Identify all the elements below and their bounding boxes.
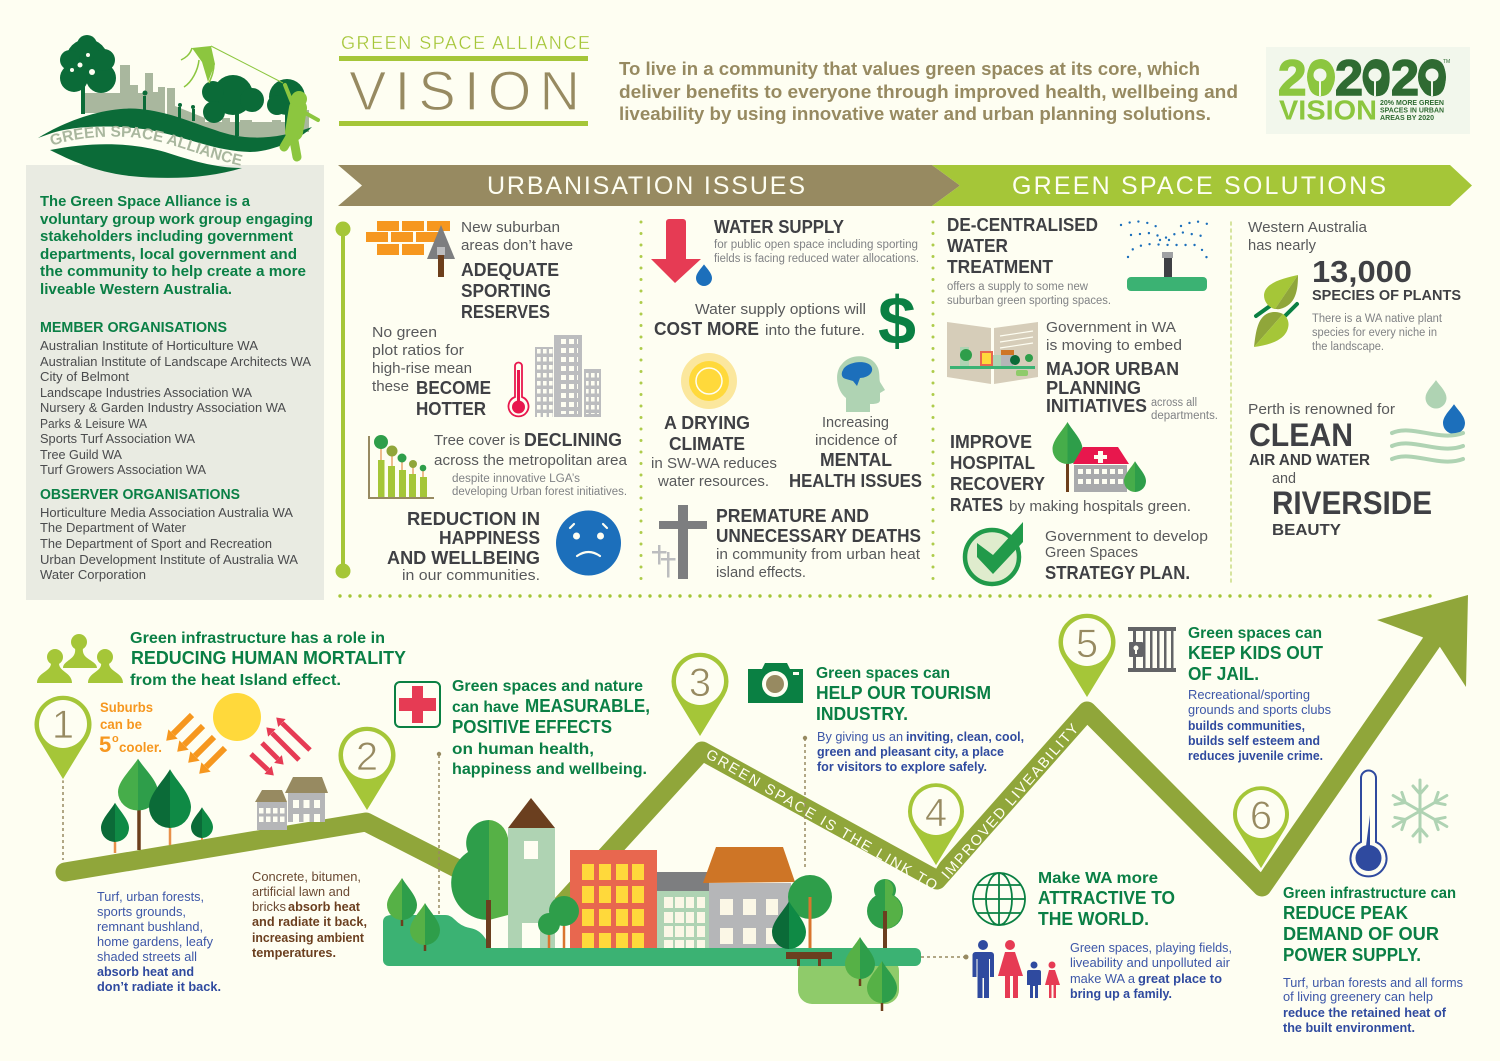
text: premature deaths: in community from urban heat xyxy=(716,546,921,563)
text: tourism: for visitors to explore safely. xyxy=(817,760,987,774)
observer organisations list: The Department of Water xyxy=(40,521,186,535)
text: 13,000 species of plants: has nearly xyxy=(1248,237,1316,254)
text: strategy plan xyxy=(1045,528,1208,583)
text: strategy plan: Green Spaces xyxy=(1045,544,1138,561)
text: turf and forests: don’t radiate it back. xyxy=(97,980,221,994)
member organisations list: Nursery & Garden Industry Association WA xyxy=(40,401,287,415)
text: 13,000 species of plants: SPECIES OF PLANTS xyxy=(1312,287,1461,304)
text: a drying climate: A DRYING xyxy=(664,412,750,433)
road caption xyxy=(703,721,1082,894)
text: jail: builds self esteem and xyxy=(1188,734,1320,748)
logo: 20 20 vision: 2020 xyxy=(1335,50,1447,106)
column: urbanisation issues two xyxy=(651,216,922,581)
icon: thermometer and towers xyxy=(508,335,601,417)
icon: trees on the hill xyxy=(101,759,213,853)
text: cost more: COST MORE xyxy=(654,318,759,339)
member organisations list: Australian Institute of Horticulture WA xyxy=(40,339,259,353)
text: positive effects: Green spaces and nature xyxy=(452,678,643,695)
text: concrete and bitumen xyxy=(252,870,367,960)
icon: globe xyxy=(973,873,1025,925)
ground strip xyxy=(383,948,921,966)
map pin 2 xyxy=(338,726,396,811)
callout: suburbs cooler: Suburbs xyxy=(100,699,153,715)
member organisations list: Turf Growers Association WA xyxy=(40,463,207,477)
text: jail: KEEP KIDS OUT xyxy=(1188,642,1324,663)
text: reduction in happiness: REDUCTION IN xyxy=(407,508,540,529)
text: de-centralised water treatment: WATER xyxy=(947,235,1008,256)
text: mental health issues: MENTAL xyxy=(820,449,892,470)
text: great place: Green spaces, playing fields, xyxy=(1070,941,1232,955)
section 5: keep kids out of jail xyxy=(1058,613,1331,763)
text: tree cover declining: DECLINING xyxy=(524,429,622,450)
text: jail: Green spaces can xyxy=(1188,625,1322,642)
text: water supply: WATER SUPPLY xyxy=(714,216,845,237)
vision statement: liveability by using innovative water and urban planning solutions. xyxy=(619,103,1211,124)
logo: 20 20 vision: AREAS BY 2020 xyxy=(1380,113,1434,122)
text: clean air and riverside beauty xyxy=(1248,401,1432,539)
text: positive effects: on human health, xyxy=(452,741,594,758)
text: mental health issues: incidence of xyxy=(815,432,898,449)
member organisations list: MEMBER ORGANISATIONS xyxy=(40,320,227,336)
text: turf and forests: remnant bushland, xyxy=(97,920,203,934)
text: improve hospital recovery rates: IMPROVE xyxy=(950,431,1032,452)
member organisations list: Parks & Leisure WA xyxy=(40,417,148,431)
text: power supply: Green infrastructure can xyxy=(1283,885,1456,902)
text: improve hospital recovery rates xyxy=(950,431,1191,515)
text: become hotter: high-rise mean xyxy=(372,360,472,377)
column: green space solutions one xyxy=(947,214,1218,584)
text: clean air and riverside beauty: CLEAN xyxy=(1249,417,1353,453)
observer organisations list xyxy=(40,487,299,582)
text: a drying climate: CLIMATE xyxy=(669,433,745,454)
text: reduction in happiness: AND WELLBEING xyxy=(387,547,540,568)
text: jail: Recreational/sporting xyxy=(1188,688,1310,702)
map pin 1 xyxy=(34,695,92,780)
text: clean air and riverside beauty: BEAUTY xyxy=(1272,522,1341,539)
text: turf and forests: Turf, urban forests, xyxy=(97,890,204,904)
text: clean air and riverside beauty: AIR AND WATER xyxy=(1249,452,1370,469)
text: major urban planning initiatives: INITIATIVES xyxy=(1046,395,1147,416)
road caption: GREEN SPACE IS THE LINK TO xyxy=(703,747,940,894)
column: green space solutions two xyxy=(1248,219,1465,539)
text: tourism xyxy=(816,665,1024,774)
text: mental health issues: HEALTH ISSUES xyxy=(789,470,922,491)
text: power supply: Turf, urban forests and all forms xyxy=(1283,976,1463,990)
text: premature deaths: PREMATURE AND xyxy=(716,505,869,526)
icon: leaves xyxy=(1254,275,1298,347)
member organisations list: Landscape Industries Association WA xyxy=(40,386,253,400)
icon: check mark xyxy=(965,522,1023,584)
text: water supply: for public open space including sporting xyxy=(714,239,918,251)
logo: 20 20 vision: VISION xyxy=(1279,94,1377,126)
text: concrete and bitumen: and radiate it back, xyxy=(252,915,367,929)
text: attractive to the world: Make WA more xyxy=(1038,870,1158,887)
text: power supply: REDUCE PEAK xyxy=(1283,902,1409,923)
text: jail: OF JAIL. xyxy=(1188,663,1259,684)
text: great place: liveability and unpolluted air xyxy=(1070,956,1230,970)
icon: people xyxy=(37,634,123,683)
text: attractive to the world xyxy=(1038,870,1175,929)
text: major urban planning initiatives: MAJOR URBAN xyxy=(1046,358,1179,379)
icon: medical cross xyxy=(395,682,440,727)
icon: urban plan book xyxy=(947,322,1038,384)
small trees xyxy=(387,875,903,1011)
text: major urban planning initiatives: across all xyxy=(1151,397,1197,409)
vision statement xyxy=(619,58,1238,124)
observer organisations list: Urban Development Institute of Australia WA xyxy=(40,553,299,567)
text: major urban planning initiatives: is moving to embed xyxy=(1046,337,1182,354)
text: improve hospital recovery rates: RATES xyxy=(950,494,1003,515)
banner: urbanisation issues: URBANISATION ISSUES xyxy=(487,172,805,200)
icon: jail bars xyxy=(1128,627,1176,672)
text: cost more xyxy=(654,301,866,339)
text: power supply xyxy=(1283,885,1463,1035)
logo: 20 20 vision xyxy=(1266,47,1470,134)
member organisations list: Australian Institute of Landscape Architects WA xyxy=(40,355,312,369)
text: turf and forests: absorb heat and xyxy=(97,965,194,979)
icon: water down arrow and drop xyxy=(651,219,712,286)
section 2: measurable positive effects xyxy=(338,678,650,811)
text: premature deaths: island effects. xyxy=(716,564,806,581)
text: reduction in happiness xyxy=(387,508,540,584)
heading: REDUCING HUMAN MORTALITY xyxy=(131,647,407,668)
text: turf and forests xyxy=(97,890,221,994)
text: jail: builds communities, xyxy=(1188,719,1305,733)
icon: sun xyxy=(681,353,737,409)
text: become hotter: HOTTER xyxy=(416,398,486,419)
text: tourism: HELP OUR TOURISM xyxy=(816,682,991,703)
icon: snowflake xyxy=(1390,780,1450,842)
logo: 20 20 vision: TM xyxy=(1443,59,1450,65)
text: concrete and bitumen: increasing ambient xyxy=(252,931,365,945)
text: become hotter: these xyxy=(372,378,409,395)
callout: suburbs cooler xyxy=(99,699,162,757)
logo: green space alliance xyxy=(38,35,320,178)
building: middle block xyxy=(657,872,709,948)
text: water supply xyxy=(714,216,919,265)
intro text: stakeholders including government xyxy=(40,229,293,245)
text: 13,000 species of plants: the landscape. xyxy=(1312,341,1384,353)
text: great place: bring up a family. xyxy=(1070,987,1172,1001)
text: 13,000 species of plants: species for every niche in xyxy=(1312,327,1437,339)
text: become hotter: plot ratios for xyxy=(372,342,464,359)
map pin 3: 3 xyxy=(689,661,711,705)
callout: suburbs cooler: cooler. xyxy=(119,739,162,755)
text: adequate sporting reserves: RESERVES xyxy=(461,301,550,322)
text: de-centralised water treatment: DE-CENTRALISED xyxy=(947,214,1098,235)
tree: large xyxy=(451,820,508,948)
member organisations list: City of Belmont xyxy=(40,370,130,384)
map pin 4 xyxy=(907,782,965,867)
text: become hotter: BECOME xyxy=(416,377,491,398)
callout: suburbs cooler: can be xyxy=(100,716,142,732)
heading xyxy=(130,630,407,689)
map pin 6 xyxy=(1232,785,1290,870)
icon: water drops and waves xyxy=(1392,380,1465,462)
text: premature deaths xyxy=(716,505,921,581)
text: concrete and bitumen: bricks xyxy=(252,900,286,914)
text: become hotter: No green xyxy=(372,324,437,341)
intro text: the community to help create a more xyxy=(40,264,306,280)
text: attractive to the world: ATTRACTIVE TO xyxy=(1038,887,1175,908)
map pin 6: 6 xyxy=(1250,794,1272,838)
icon: houses xyxy=(255,777,328,830)
map pin 2: 2 xyxy=(356,735,378,779)
callout: suburbs cooler: 5 xyxy=(99,732,111,757)
text: strategy plan: STRATEGY PLAN. xyxy=(1045,562,1190,583)
icon: sun with radiation arrows xyxy=(173,693,310,770)
text: positive effects: MEASURABLE, xyxy=(525,695,650,716)
text: adequate sporting reserves: SPORTING xyxy=(461,280,551,301)
text: great place xyxy=(1070,941,1232,1001)
text: cost more: into the future. xyxy=(765,322,865,339)
text: a drying climate: in SW-WA reduces xyxy=(651,455,777,472)
icon: sad face xyxy=(556,510,621,576)
icon: sprinkler xyxy=(1121,221,1212,291)
text: positive effects: happiness and wellbeing. xyxy=(452,761,647,778)
text: mental health issues: Increasing xyxy=(822,414,889,431)
text: adequate sporting reserves: ADEQUATE xyxy=(461,259,559,280)
arrow head xyxy=(1377,595,1468,687)
text: adequate sporting reserves xyxy=(461,219,573,322)
chart: green space zig-zag road xyxy=(65,595,1468,912)
text: de-centralised water treatment xyxy=(947,214,1111,307)
map pin 1: 1 xyxy=(52,703,74,747)
text: positive effects: POSITIVE EFFECTS xyxy=(452,716,612,737)
text: de-centralised water treatment: TREATMENT xyxy=(947,256,1054,277)
panel: about the alliance xyxy=(26,165,324,600)
text: major urban planning initiatives: departments. xyxy=(1151,410,1218,422)
text: premature deaths: UNNECESSARY DEATHS xyxy=(716,525,921,546)
text: power supply: DEMAND OF OUR xyxy=(1283,923,1439,944)
building: red apartments xyxy=(570,850,657,948)
section 3: help our tourism industry xyxy=(671,652,1024,774)
text: major urban planning initiatives xyxy=(1046,319,1218,422)
text: mental health issues xyxy=(789,414,922,491)
callout: suburbs cooler: o xyxy=(112,733,119,745)
member organisations list: Sports Turf Association WA xyxy=(40,432,196,446)
logo banner text: GREEN SPACE ALLIANCE xyxy=(50,126,242,166)
text: de-centralised water treatment: offers a supply to some new xyxy=(947,281,1089,293)
text: tree cover declining: developing Urban forest initiatives. xyxy=(452,486,627,498)
banner: urbanisation issues xyxy=(338,165,960,206)
heading: green space alliance vision: VISION xyxy=(349,59,580,122)
intro text: voluntary group work group engaging xyxy=(40,212,313,228)
text: turf and forests: sports grounds, xyxy=(97,905,186,919)
section 1: reducing human mortality xyxy=(34,630,407,994)
map pin 5: 5 xyxy=(1076,622,1098,666)
logo: 20 20 vision: 20 xyxy=(1278,50,1335,106)
road caption: IMPROVED LIVEABILITY xyxy=(939,721,1082,883)
text: concrete and bitumen: absorb heat xyxy=(288,900,361,914)
building: tower xyxy=(508,798,555,948)
heading: green space alliance vision xyxy=(339,33,590,126)
text: water supply: fields is facing reduced water allocations. xyxy=(714,253,919,265)
section 4: attractive to the world xyxy=(907,782,1232,1001)
text: tree cover declining: Tree cover is xyxy=(434,432,520,449)
text: positive effects xyxy=(452,678,650,778)
heading: from the heat Island effect. xyxy=(130,672,341,689)
vision statement: deliver benefits to everyone through improved health, wellbeing and xyxy=(619,81,1238,102)
text: major urban planning initiatives: PLANNING xyxy=(1046,377,1141,398)
logo: 20 20 vision: SPACES IN URBAN xyxy=(1380,106,1444,114)
text: clean air and riverside beauty: and xyxy=(1272,470,1296,487)
text: great place: make WA a xyxy=(1070,972,1135,986)
map pin 4: 4 xyxy=(925,791,947,835)
text: concrete and bitumen: Concrete, bitumen, xyxy=(252,870,361,884)
icon: blue thermometer xyxy=(1350,770,1386,876)
banner: green space solutions: GREEN SPACE SOLUTIONS xyxy=(1012,172,1386,200)
text: power supply: of living greenery can help xyxy=(1283,990,1433,1004)
text: clean air and riverside beauty: RIVERSIDE xyxy=(1272,485,1432,521)
text: adequate sporting reserves: New suburban xyxy=(461,219,560,236)
text: tourism: INDUSTRY. xyxy=(816,703,908,724)
text: reduction in happiness: HAPPINESS xyxy=(439,527,540,548)
observer organisations list: Horticulture Media Association Australia WA xyxy=(40,506,294,520)
map pin 5 xyxy=(1058,613,1116,698)
observer organisations list: Water Corporation xyxy=(40,568,146,582)
logo: 20 20 vision: 20% MORE GREEN xyxy=(1380,98,1444,107)
text: turf and forests: shaded streets all xyxy=(97,950,197,964)
text: reduction in happiness: in our communities. xyxy=(402,567,540,584)
text: tree cover declining xyxy=(434,429,628,498)
text: strategy plan: Government to develop xyxy=(1045,528,1208,545)
icon: head with brain xyxy=(837,356,885,412)
text: positive effects: can have xyxy=(452,699,519,716)
icon: green hospital xyxy=(1052,422,1146,492)
observer organisations list: The Department of Sport and Recreation xyxy=(40,537,272,551)
text: tourism: Green spaces can xyxy=(816,665,950,682)
text: 13,000 species of plants: There is a WA native plant xyxy=(1312,313,1443,325)
column: urbanisation issues one xyxy=(366,219,628,584)
bench xyxy=(786,952,832,966)
member organisations list: Tree Guild WA xyxy=(40,448,123,462)
text: jail: grounds and sports clubs xyxy=(1188,703,1331,717)
text: 13,000 species of plants xyxy=(1248,219,1461,353)
icon: dollar sign: $ xyxy=(878,283,916,359)
text: become hotter xyxy=(372,324,491,419)
icon: declining tree chart xyxy=(369,435,434,498)
text: clean air and riverside beauty: Perth is renowned for xyxy=(1248,401,1395,418)
text: attractive to the world: THE WORLD. xyxy=(1038,908,1149,929)
text: power supply: POWER SUPPLY. xyxy=(1283,944,1421,965)
text: tourism: By giving us an xyxy=(817,730,903,744)
text: great place: great place to xyxy=(1138,972,1222,986)
section 6: reduce peak demand xyxy=(1232,770,1463,1035)
text: major urban planning initiatives: Government in WA xyxy=(1046,319,1176,336)
text: tourism: inviting, clean, cool, xyxy=(906,730,1024,744)
text: concrete and bitumen: artificial lawn and xyxy=(252,885,350,899)
text: improve hospital recovery rates: by making hospitals green. xyxy=(1009,498,1191,515)
intro text: departments, local government and xyxy=(40,247,297,263)
icon: bricks and trowel xyxy=(366,221,455,277)
intro text: The Green Space Alliance is a xyxy=(40,194,251,210)
text: tree cover declining: despite innovative LGA’s xyxy=(452,473,580,485)
member organisations list xyxy=(40,320,312,477)
text: concrete and bitumen: temperatures. xyxy=(252,946,336,960)
text: 13,000 species of plants: 13,000 xyxy=(1312,254,1412,289)
vision statement: To live in a community that values green spaces at its core, which xyxy=(619,58,1200,79)
building: orange roof block xyxy=(703,847,795,948)
text: improve hospital recovery rates: RECOVERY xyxy=(950,473,1046,494)
intro text: liveable Western Australia. xyxy=(40,282,232,298)
text: improve hospital recovery rates: HOSPITAL xyxy=(950,452,1035,473)
observer organisations list: OBSERVER ORGANISATIONS xyxy=(40,487,240,503)
banner: green space solutions xyxy=(932,165,1472,206)
text: power supply: reduce the retained heat of xyxy=(1283,1006,1447,1020)
text: adequate sporting reserves: areas don’t have xyxy=(461,237,573,254)
text: jail: reduces juvenile crime. xyxy=(1188,749,1323,763)
icon: camera xyxy=(748,663,803,703)
text: 13,000 species of plants: Western Australia xyxy=(1248,219,1368,236)
icon: family xyxy=(972,940,1060,998)
text: jail xyxy=(1188,625,1331,763)
text: cost more: Water supply options will xyxy=(695,301,866,318)
text: power supply: the built environment. xyxy=(1283,1021,1415,1035)
text: de-centralised water treatment: suburban green sporting spaces. xyxy=(947,295,1111,307)
text: turf and forests: home gardens, leafy xyxy=(97,935,214,949)
heading: green space alliance vision: GREEN SPACE ALLIANCE xyxy=(341,33,590,53)
text: a drying climate: water resources. xyxy=(657,473,769,490)
text: tourism: green and pleasant city, a place xyxy=(817,745,1004,759)
intro text xyxy=(40,194,313,298)
icon: grave crosses xyxy=(652,505,707,579)
text: a drying climate xyxy=(651,412,777,490)
illustration: town on green ground xyxy=(383,798,921,1011)
heading: Green infrastructure has a role in xyxy=(130,630,385,647)
map pin 3 xyxy=(671,652,729,737)
text: tree cover declining: across the metropolitan area xyxy=(434,452,628,469)
